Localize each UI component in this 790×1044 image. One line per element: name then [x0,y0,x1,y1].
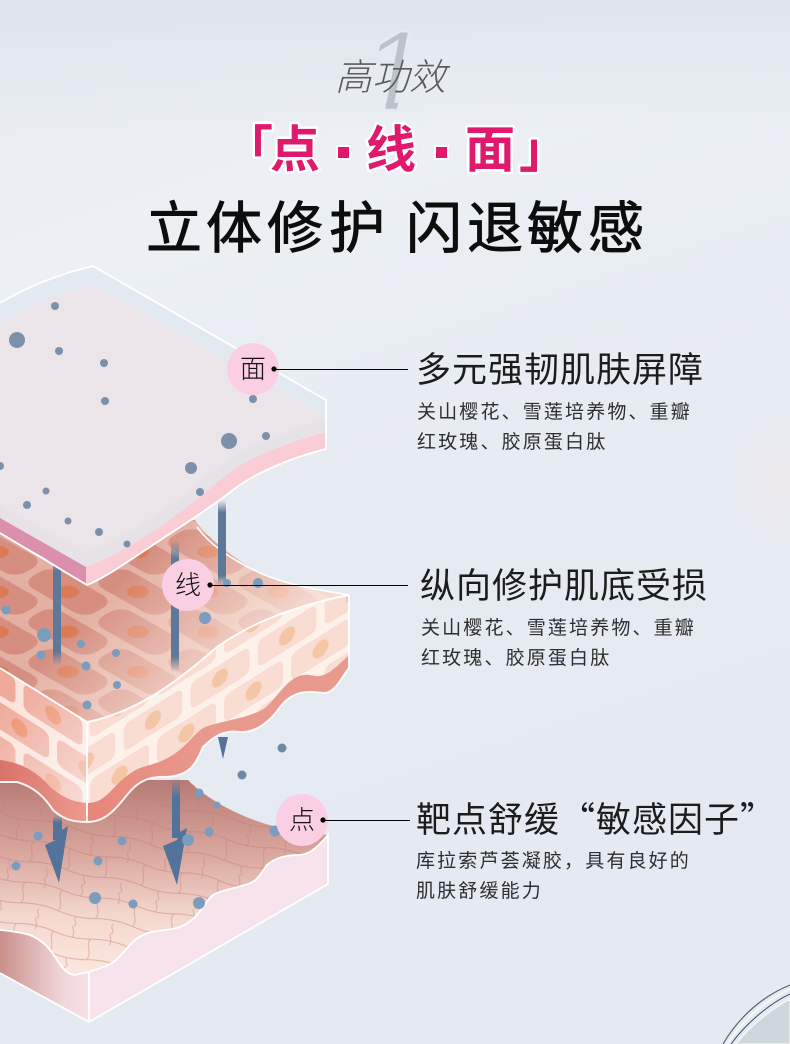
callout description: 关山樱花、雪莲培养物、重瓣 [417,401,692,423]
marker circle 面 [227,343,279,395]
block outline [0,595,349,822]
front lighter lip [0,420,325,567]
callout description: 红玫瑰、胶原蛋白肽 [417,431,607,453]
section label: 高功效: 高功效 [335,57,451,98]
product jar edge [723,985,790,1044]
particles on top film [0,302,270,548]
leader line 点 [320,817,410,823]
marker circle 线 [162,559,214,611]
top face with cells [0,520,349,722]
right face with cells [87,595,349,803]
callout description [416,850,691,902]
block outline [0,835,328,1022]
marker circle 线: 线 [175,570,201,600]
floor surface with cell net [0,780,328,975]
marker circle 面: 面 [240,354,266,384]
marker circle 点: 点 [289,805,315,835]
marker circle 点 [276,794,328,846]
leader line 面 [271,366,408,372]
pink right strip [86,432,326,585]
callout description: 红玫瑰、胶原蛋白肽 [421,647,611,669]
block right face [89,835,328,1022]
callout description [421,617,696,669]
layer: top film [0,266,326,585]
callout title: 靶点舒缓“敏感因子” [416,792,776,843]
bubbles on bottom layer [12,744,286,909]
heading separator dots [338,147,447,158]
lower arrow shafts and heads [45,737,228,885]
arrow shafts through middle layer [53,500,226,672]
membrane surface [0,284,325,567]
heading: 点线面: 「点线面」 [223,122,569,178]
clear outer film [0,266,326,585]
callout: 点 [276,792,776,902]
left face with cells [0,668,87,803]
layer: middle cell block [0,520,349,822]
film outline [0,266,326,585]
decorative section number 1: 1 [361,8,424,135]
block left face [0,930,89,1022]
callout description: 肌肤舒缓能力 [416,880,543,902]
layer: bottom skin block [0,780,328,1022]
bubbles on middle layer [2,578,263,710]
right wavy band [87,655,349,822]
illustration: skin layers [0,266,349,1022]
callout title: 多元强韧肌肤屏障 [416,351,704,390]
callout description [417,401,692,453]
callout title: 纵向修护肌底受损 [420,567,708,606]
left wavy band [0,760,87,822]
callout: 线 [162,559,708,669]
callout: 面 [227,343,704,453]
heading: 立体修护 闪退敏感: 立体修护闪退敏感 [146,197,644,260]
leader line 线 [207,582,408,588]
pink left strip [0,518,86,585]
callout description: 库拉索芦荟凝胶，具有良好的 [416,850,691,872]
callout description: 关山樱花、雪莲培养物、重瓣 [421,617,696,639]
